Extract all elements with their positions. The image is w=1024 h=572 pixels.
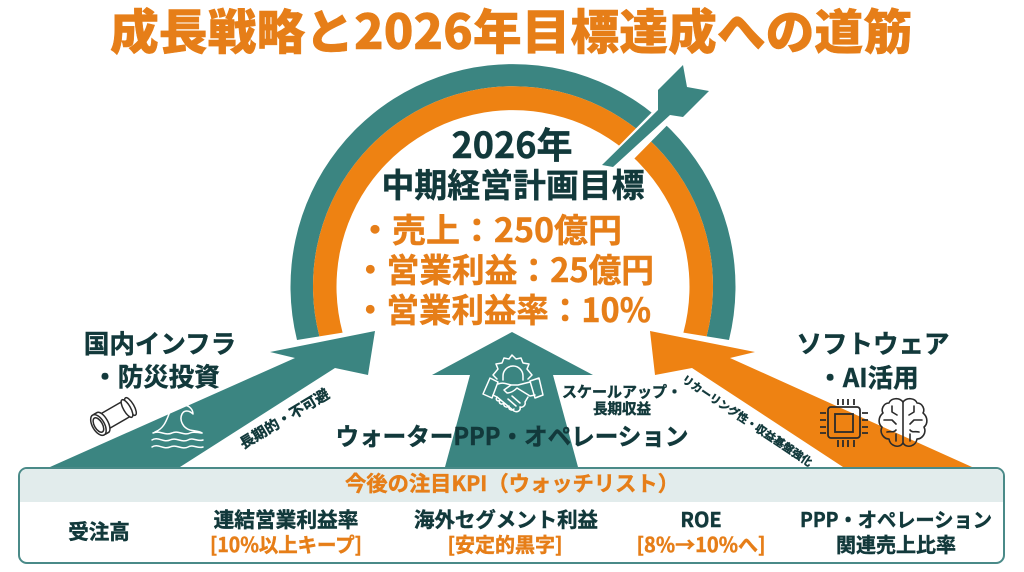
KPI: overseas segment: [414, 503, 598, 558]
icon: chip: [820, 399, 868, 447]
target subheading: 中期経営計画目標: [382, 159, 644, 207]
icon: wave: [152, 405, 203, 448]
label: long-term, unavoidable: 長期的・不可避: [235, 383, 334, 453]
target: sales: ・売上：250億円: [358, 204, 622, 252]
arc: orange inner ring: [313, 86, 713, 336]
icon: dart arrow hitting the target: [602, 65, 709, 167]
label: software and AI: [796, 324, 950, 395]
KPI: consolidated margin: [10%以上キープ]: [210, 529, 362, 558]
label: software and AI: ・AI活用: [817, 358, 919, 395]
KPI: consolidated margin: 連結営業利益率: [214, 503, 358, 533]
panel: 2026 targets: [354, 117, 654, 332]
panel heading: 今後の注目KPI（ウォッチリスト）: [345, 468, 679, 498]
target: operating profit: ・営業利益：25億円: [354, 244, 654, 292]
KPI: overseas segment: [安定的黒字]: [447, 529, 563, 558]
label: scale-up and long-term returns: 長期収益: [593, 398, 651, 419]
label: scale-up and long-term returns: [562, 381, 682, 419]
KPI: ROE: [8%→10%へ]: [636, 529, 766, 558]
icon: pipe: [87, 395, 139, 438]
KPI: PPP revenue ratio: [800, 504, 992, 558]
icon: brain: [879, 399, 927, 446]
panel header band: [20, 469, 1003, 502]
icon: gear: [493, 355, 532, 380]
arrow: software: [650, 331, 972, 467]
label: domestic infrastructure: 国内インフラ: [84, 324, 236, 361]
label: software and AI: ソフトウェア: [796, 324, 950, 361]
target heading: 2026年: [452, 117, 572, 169]
KPI: ROE: [636, 504, 766, 558]
label: water PPP: ウォーターPPP・オペレーション: [336, 417, 688, 452]
target arc: [290, 64, 736, 340]
KPI: PPP revenue ratio: PPP・オペレーション: [800, 504, 992, 533]
arrow: water PPP: [432, 332, 593, 467]
panel background: [19, 468, 1004, 563]
label: recurring revenue base: リカーリング性・収益基盤強化: [679, 371, 816, 470]
target: operating margin: ・営業利益率：10%: [354, 284, 651, 332]
KPI: overseas segment: 海外セグメント利益: [414, 503, 598, 533]
label: domestic infrastructure: [84, 324, 236, 394]
panel: KPI watchlist: [19, 468, 1004, 563]
arc: teal outer ring: [290, 64, 736, 340]
icon: handshake: [483, 378, 543, 412]
KPI: ROE: ROE: [680, 504, 722, 533]
label: scale-up and long-term returns: スケールアップ・: [562, 381, 682, 402]
KPI: consolidated margin: [210, 503, 362, 558]
label: domestic infrastructure: ・防災投資: [92, 357, 220, 394]
icon: gear and handshake: [483, 355, 543, 412]
KPI: orders: 受注高: [68, 515, 130, 545]
KPI: PPP revenue ratio: 関連売上比率: [836, 529, 956, 558]
arrow: domestic infrastructure: [50, 331, 375, 467]
